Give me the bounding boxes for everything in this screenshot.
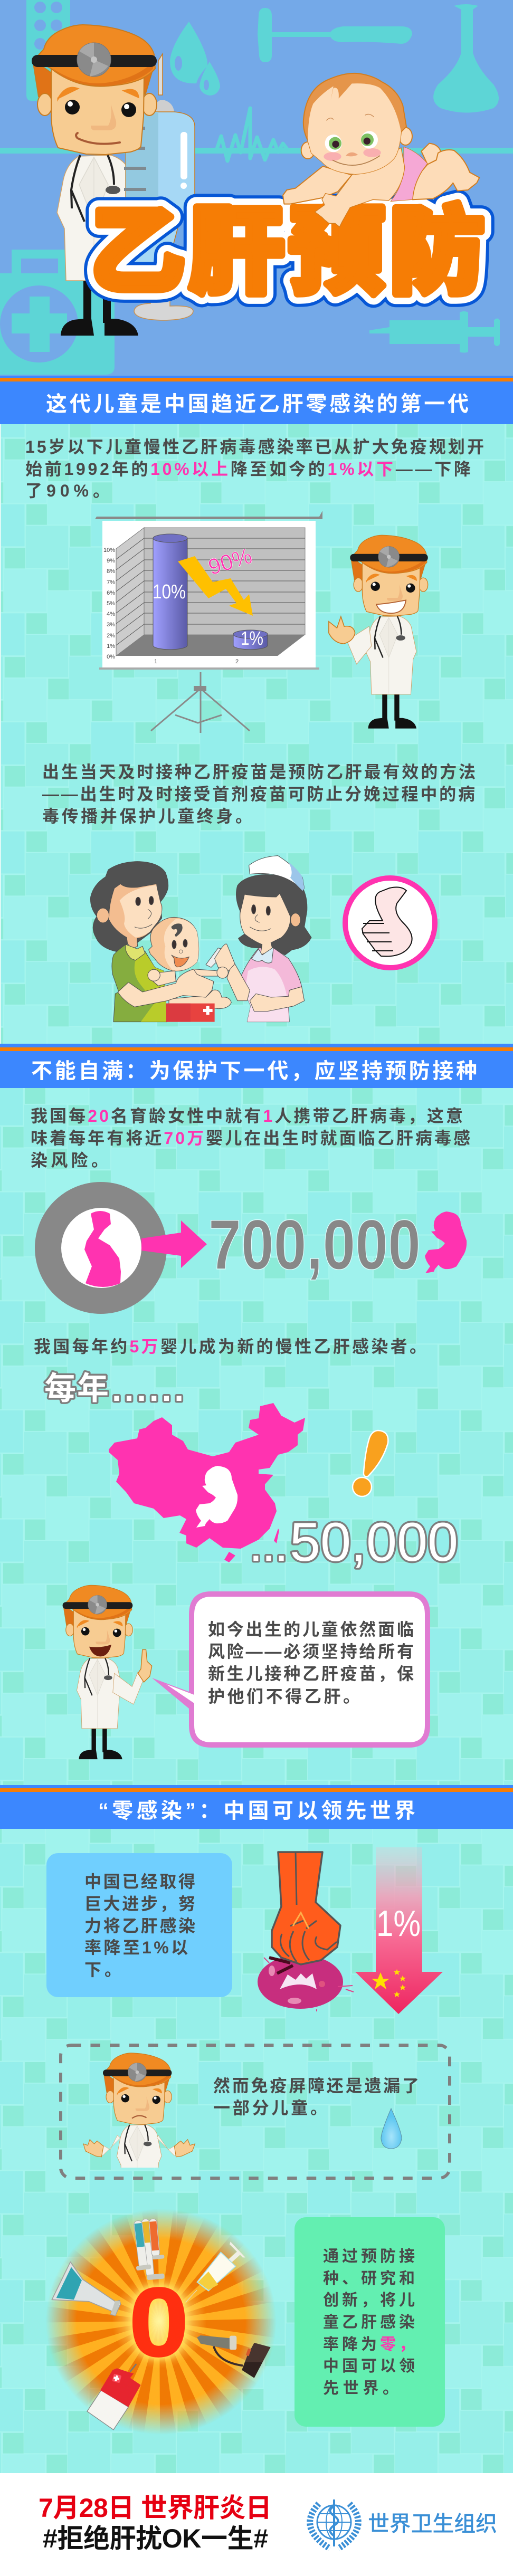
- number 50,000: ...: [251, 1530, 286, 1568]
- text block: infection rate decline: 了90%。: [25, 481, 110, 500]
- panel: green text box: 率降为零，: [323, 2336, 415, 2353]
- hero title: 乙肝预防: [90, 199, 484, 306]
- icon: syringe: [186, 2241, 245, 2302]
- illustration: sunburst with zero: [41, 2202, 278, 2440]
- panel: green text box: 种、研究和: [323, 2270, 415, 2287]
- hero baby: [283, 73, 479, 227]
- section header 3: [0, 1785, 513, 1829]
- baby legs and torso: [169, 990, 231, 1009]
- text block: birth dose: [42, 762, 476, 826]
- first aid box: [166, 1004, 215, 1022]
- panel: blue text box: 中国已经取得: [84, 1872, 195, 1891]
- label 90 percent: 90%: [205, 543, 255, 580]
- icon: water drop: [381, 2108, 402, 2149]
- baby diaper: [391, 147, 428, 202]
- illustration: mother, baby and nurse: [90, 856, 311, 1022]
- nurse dress: [241, 948, 302, 1022]
- illustration: virus: [258, 1955, 354, 2011]
- y axis labels: 9%: [107, 558, 115, 564]
- y axis labels: 1%: [107, 643, 115, 650]
- section header 3: “零感染”：中国可以领先世界: [98, 1799, 415, 1823]
- baby head: [149, 917, 199, 971]
- chart walls: [144, 528, 305, 635]
- baby chest and right arm: [315, 148, 405, 227]
- mother arm: [118, 969, 214, 1007]
- callout: speech bubble: 风险——必须坚持给所有: [208, 1642, 414, 1661]
- text block: women of childbearing age: 味着每年有将近70万婴儿在出生时就面临乙肝病毒感: [31, 1129, 470, 1148]
- doctor pointing: [63, 1585, 152, 1759]
- dashed box text: 然而免疫屏障还是遗漏了: [213, 2076, 419, 2095]
- y axis labels: 8%: [107, 568, 115, 575]
- panel: green text box: 童乙肝感染: [323, 2314, 415, 2331]
- illustration: sunburst with zero: 0: [129, 2268, 189, 2377]
- panel: dashed box: [59, 2044, 451, 2180]
- label: every year: 每年: [44, 1371, 109, 1406]
- panel: blue text box: 率降至1%以: [84, 1938, 188, 1957]
- logo: WHO emblem: [310, 2499, 358, 2549]
- section header 2: [0, 1044, 513, 1088]
- text block: women of childbearing age: 我国每20名育龄女性中就有1人携带乙肝病毒，这意: [31, 1106, 463, 1125]
- text block: birth dose: 毒传播并保护儿童终身。: [42, 807, 252, 826]
- arrow: down to one percent: [355, 1847, 443, 2014]
- callout: speech bubble: [152, 1591, 430, 1748]
- section header 1: [0, 376, 513, 422]
- y axis labels: [103, 547, 115, 660]
- hero heartbeat line: [193, 108, 303, 161]
- nurse hair: [236, 874, 311, 955]
- callout: speech bubble: 护他们不得乙肝。: [208, 1687, 360, 1706]
- icon: microscope device: [197, 2335, 271, 2378]
- y axis labels: 4%: [107, 611, 115, 617]
- baby left arm: [283, 166, 352, 204]
- syringe in nurse hand: [206, 948, 225, 967]
- y axis labels: 5%: [107, 600, 115, 607]
- icon: flask: [52, 2262, 120, 2315]
- text block: infection rate decline: 15岁以下儿童慢性乙肝病毒感染率已从扩大免疫规划开: [25, 437, 484, 456]
- y axis labels: 6%: [107, 590, 115, 596]
- baby head: [303, 73, 406, 174]
- number 700,000: 700,000: [208, 1206, 421, 1284]
- nurse face: [291, 913, 300, 927]
- label: every year: ......: [112, 1370, 184, 1408]
- mother face: [108, 884, 162, 949]
- baby arms: [153, 971, 176, 986]
- bar 10 percent: 10%: [153, 581, 186, 603]
- logo text: 世界卫生组织: [368, 2512, 497, 2536]
- icon: orange exclamation: [353, 1430, 388, 1496]
- panel: dashed box: 一部分儿童。: [213, 2098, 327, 2117]
- y axis labels: 3%: [107, 622, 115, 628]
- icon: pink fetus: [425, 1211, 467, 1273]
- x axis labels: 2: [235, 659, 239, 665]
- hero title: 乙肝预防: [90, 199, 484, 306]
- text block: infection rate decline: 始前1992年的10%以上降至如今的1%以下——下降: [25, 460, 471, 479]
- panel: green text box: 中国可以领: [323, 2358, 415, 2375]
- doctor presenting chart: [329, 535, 428, 729]
- arrow: down to one percent: 1%: [376, 1903, 421, 1944]
- panel: blue text box: 力将乙肝感染: [84, 1916, 195, 1935]
- footer text: campaign hashtag: #拒绝肝扰OK一生#: [43, 2524, 268, 2553]
- baby rear knee: [421, 144, 441, 165]
- panel: blue text box: 巨大进步，努: [84, 1894, 195, 1913]
- x axis labels: [154, 659, 239, 665]
- china flag stars: [372, 1969, 406, 1997]
- number 50,000: 50,000: [290, 1512, 458, 1573]
- mother dress: [112, 944, 167, 1022]
- illustration: fist: [272, 1852, 340, 1964]
- y axis labels: 10%: [103, 547, 115, 554]
- lightning arrow: [178, 556, 253, 616]
- chart: presentation board with 3D bar chart: [95, 511, 322, 733]
- panel: section 2 tiled background: [0, 1088, 513, 1785]
- x axis labels: 1: [154, 659, 157, 665]
- nurse arms: [227, 964, 250, 1001]
- panel: green text box: 先世界。: [323, 2380, 398, 2397]
- icon: pregnant woman in gray ring: [35, 1182, 167, 1314]
- panel: blue text box: 下。: [84, 1960, 121, 1979]
- footer text: world hepatitis day: 7月28日 世界肝炎日: [39, 2493, 272, 2523]
- y axis labels: 0%: [107, 654, 115, 660]
- bar 10 percent: [153, 534, 187, 650]
- panel: green text box: 通过预防接: [323, 2248, 415, 2265]
- number zero: 0: [129, 2268, 189, 2377]
- y axis labels: 2%: [107, 633, 115, 639]
- y axis labels: 7%: [107, 579, 115, 586]
- callout: speech bubble: 如今出生的儿童依然面临: [208, 1620, 414, 1639]
- text block: women of childbearing age: 染风险。: [31, 1151, 108, 1170]
- mother hair: [90, 862, 168, 951]
- baby leg: [413, 150, 479, 199]
- icon: test tubes: [130, 2218, 165, 2280]
- text block: birth dose: ——出生时及时接受首剂疫苗可防止分娩过程中的病: [42, 785, 475, 804]
- panel: blue text box: [46, 1853, 232, 1997]
- giant syringe: [124, 54, 195, 320]
- section header 2: 不能自满：为保护下一代，应坚持预防接种: [31, 1060, 477, 1083]
- icon: thumbs up in pink circle: [345, 878, 435, 968]
- background: hero panel: [0, 0, 513, 376]
- hero decorative medical icons: [0, 0, 513, 375]
- label: every year: [44, 1370, 184, 1408]
- hero doctor with giant syringe: [32, 25, 195, 336]
- panel: section 3 tiled background: [0, 1829, 513, 2473]
- panel: green text box: [294, 2217, 445, 2427]
- doctor shrugging: [83, 2053, 195, 2168]
- panel: green text box: 创新，将儿: [323, 2292, 415, 2309]
- text: new infections: 我国每年约5万婴儿成为新的慢性乙肝感染者。: [34, 1337, 426, 1356]
- baby ears: [301, 142, 315, 159]
- nurse cap: [249, 856, 305, 891]
- map: china with fetus: [109, 1403, 305, 1562]
- icon: blood bag: [87, 2364, 141, 2430]
- bar 1 percent: 1%: [241, 627, 263, 649]
- section header 1: 这代儿童是中国趋近乙肝零感染的第一代: [46, 393, 469, 416]
- callout: speech bubble: 新生儿接种乙肝疫苗，保: [208, 1664, 414, 1683]
- hero title: 乙肝预防: [90, 199, 484, 306]
- text block: women of childbearing age: [31, 1106, 470, 1170]
- text block: infection rate decline: [25, 437, 484, 500]
- panel: footer: [0, 2473, 513, 2576]
- sunburst rays: [41, 2202, 278, 2440]
- arrow: pink to 700,000: [141, 1220, 207, 1268]
- projection screen: [95, 511, 322, 733]
- text block: birth dose: 出生当天及时接种乙肝疫苗是预防乙肝最有效的方法: [42, 762, 476, 781]
- panel: section 1 tiled background: [0, 422, 513, 1044]
